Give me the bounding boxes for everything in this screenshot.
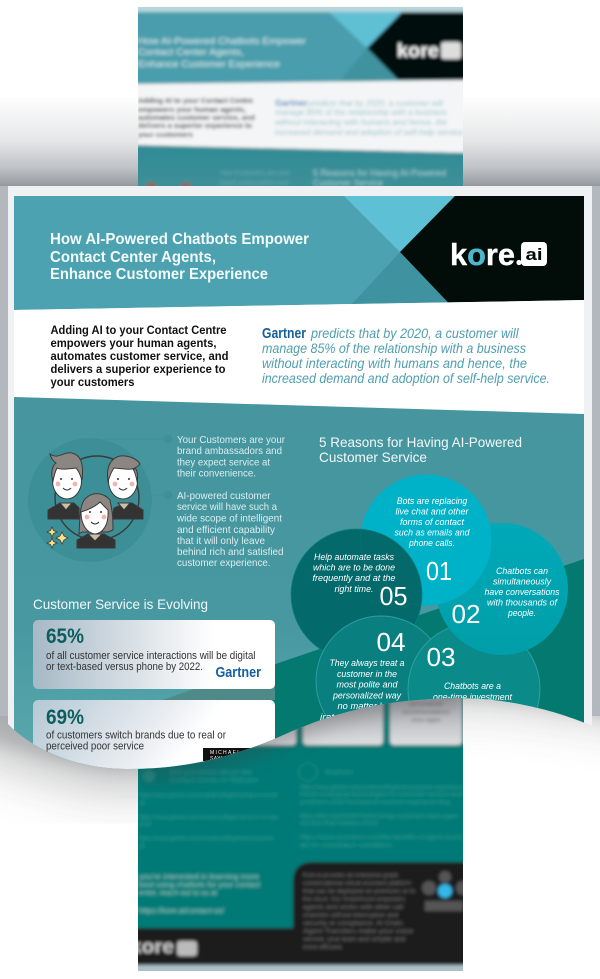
circle 01: 01 xyxy=(426,556,452,586)
Michael Saylor logo: SAYLOR xyxy=(210,756,232,762)
customer text two: that it will only leave xyxy=(177,536,265,547)
back statistics column xyxy=(139,769,279,850)
stat card 69% xyxy=(33,700,275,780)
gap wedge between cards xyxy=(160,660,275,701)
circle 03: 03 xyxy=(426,642,456,672)
teal main section xyxy=(14,397,584,780)
sheet side shadows xyxy=(0,186,600,716)
intro text: your customers xyxy=(50,376,134,389)
kore.ai logo: kore xyxy=(450,237,515,272)
back sources column: trends-emerging-technologies-in-customer-service-and xyxy=(300,791,462,798)
title: How AI-Powered Chatbots Empower xyxy=(50,231,309,248)
customer text two: customer experience. xyxy=(177,558,270,569)
circle 05 text xyxy=(312,552,408,611)
front sheet xyxy=(8,186,592,780)
back sources column: Sources xyxy=(325,769,354,776)
back footer text: the cloud. Our SmartAssist empowers xyxy=(303,896,406,903)
back header: kore xyxy=(397,41,439,62)
back statistics column: Contact Center AI Statistics xyxy=(170,777,259,784)
customer text two: service will have such a xyxy=(177,502,277,513)
circle 04: They always treat a xyxy=(330,658,404,669)
back call to action xyxy=(139,874,260,915)
back page base xyxy=(138,698,463,931)
back header: Enhance Customer Experience xyxy=(138,59,280,70)
Gartner logo: Gartner xyxy=(216,665,261,681)
back footer xyxy=(130,862,470,965)
back intro band: without interacting with humans and hence, the xyxy=(275,118,448,127)
Michael Saylor logo: MICHAEL xyxy=(210,750,240,756)
dark triangle xyxy=(352,252,448,304)
Gartner prediction xyxy=(262,325,550,386)
back stat cards: recommendations xyxy=(402,710,450,716)
back statistics column: 2019 xyxy=(139,821,151,828)
kore.ai logo: ai xyxy=(526,245,542,264)
intro text: automates customer service, and xyxy=(50,350,228,363)
customer text two: AI-powered customer xyxy=(177,491,271,502)
back statistics column: https://www.gartner.com/smarterwithgartner/ai-in-cx-now xyxy=(139,814,278,821)
customer text one: brand ambassadors and xyxy=(177,446,282,457)
blurred back page xyxy=(130,0,470,979)
back sources column: https://hbr.org/2018/07/what-brings-customers-back-again xyxy=(300,813,458,820)
back footer text xyxy=(303,872,415,951)
circle 04 xyxy=(316,616,446,746)
back statistics column: 19 xyxy=(139,800,145,807)
back footer logo: kore xyxy=(130,937,174,958)
bullet dots xyxy=(164,437,172,494)
circle 03: one-time investment xyxy=(433,692,512,703)
back call to action: https://kore.ai/contact-us/ xyxy=(139,908,224,915)
back sources column: service-that-matters-2019 xyxy=(300,820,378,827)
back footer text: agents and works with other call xyxy=(303,904,404,911)
back stat cards xyxy=(250,698,463,749)
stat card 65% xyxy=(33,620,275,689)
customer text one: Your Customers are your xyxy=(177,435,286,446)
back teal section: 5 Reasons for Having AI-Powered xyxy=(313,168,446,178)
back footer text: channels without interruption and xyxy=(303,912,398,919)
sheet drop shadow xyxy=(0,698,600,816)
intro white band xyxy=(14,300,584,414)
customer text two: behind rich and satisfied xyxy=(177,547,284,558)
back sources column: predictions-2020-and-beyond-customer-experience-blog xyxy=(300,799,450,806)
back statistics column: https://www.gartner.com/smarterwithgartner/top-cx-trends xyxy=(139,792,279,799)
circle 05 text: frequently and at the xyxy=(312,573,396,584)
back footer logo xyxy=(130,937,197,958)
circle 01: phone calls. xyxy=(408,538,455,549)
back intro band: Gartner xyxy=(275,98,308,108)
circle 01 xyxy=(360,474,492,606)
circle 03 xyxy=(408,623,540,755)
customer text two: wide scope of intelligent xyxy=(176,514,282,524)
circle 04: most polite and xyxy=(336,680,398,690)
back call to action: bout using chatbots for your contact xyxy=(139,882,260,889)
back teal section: Customer Service xyxy=(313,178,383,188)
back footer text: that can be deployed on-premises or in xyxy=(303,888,415,895)
circle 02: people. xyxy=(507,608,536,619)
back page top edge xyxy=(138,7,463,16)
back intro band: Adding AI to your Contact Centre xyxy=(138,96,253,105)
back teal section: Your Customers are your xyxy=(220,170,291,177)
circle 05 text: which are to be done xyxy=(313,562,395,574)
back statistics column: Did you know about the xyxy=(170,769,252,776)
circle 05 overlap xyxy=(291,529,422,660)
intro text: delivers a superior experience to xyxy=(50,363,226,376)
back header xyxy=(130,12,470,84)
title: Enhance Customer Experience xyxy=(50,266,268,283)
back call to action: enter, reach out to us at xyxy=(139,890,217,897)
title xyxy=(50,231,309,283)
faces xyxy=(56,478,134,524)
circle 01: forms of contact xyxy=(400,517,464,528)
back bottom edge xyxy=(138,962,463,971)
circle 04: irate the customer is. xyxy=(320,712,414,723)
back footer text: service, your team and simpler and xyxy=(303,936,405,943)
header band xyxy=(14,196,584,310)
back sources column: https://www.accenture.com/the-benefits-of-agent-assist xyxy=(300,834,462,841)
light triangle xyxy=(344,196,455,252)
back footer text: conversational virtual assistant platform xyxy=(303,880,411,887)
sheet border xyxy=(8,186,592,776)
back teal section xyxy=(138,146,463,186)
customer text two xyxy=(176,491,284,569)
customer text one xyxy=(177,435,286,480)
Gartner prediction: predicts that by 2020, a customer will xyxy=(310,326,519,341)
title: Contact Center Agents, xyxy=(50,249,216,266)
back teal section: brand ambassadors and xyxy=(220,180,288,187)
back people icon xyxy=(422,871,470,911)
circle 03: Chatbots are a xyxy=(444,681,501,692)
heading: customer service is evolving: Customer Service is Evolving xyxy=(33,596,208,612)
back intro band: automates customer service, and xyxy=(138,113,255,122)
customer text one: their convenience. xyxy=(177,468,256,480)
circle 02: have conversations xyxy=(484,587,560,598)
man right xyxy=(108,456,143,519)
circle 04: no matter how xyxy=(338,701,398,712)
stat card 65%: or text-based versus phone by 2022. xyxy=(46,661,203,673)
black logo panel xyxy=(400,196,584,302)
circle 04: 04 xyxy=(376,627,406,657)
circle 04: customer in the xyxy=(337,669,397,680)
Gartner prediction: manage 85% of the relationship with a business xyxy=(262,341,526,356)
back stat cards: once again xyxy=(411,718,441,724)
back footer text: Agent Transfers make your voice xyxy=(303,928,413,935)
back intro band: empowers your human agents, xyxy=(138,105,246,114)
heading: 5 reasons: 5 Reasons for Having AI-Powered xyxy=(319,434,522,450)
people icon xyxy=(28,438,168,562)
back statistics column: https://www.gartner.com/smarterwithgartner/customer xyxy=(139,835,275,842)
stat card 69%: of customers switch brands due to real or xyxy=(46,730,226,742)
back call to action: you're interested in learning more xyxy=(139,874,259,881)
customer text two: and efficient capability xyxy=(177,525,276,536)
Michael Saylor logo xyxy=(203,748,253,762)
customer text one: they expect service at xyxy=(177,458,270,468)
back intro band: increased demand and adoption of self-help service. xyxy=(275,128,465,137)
intro text xyxy=(50,324,228,389)
Gartner prediction: without interacting with humans and hence, the xyxy=(262,356,527,371)
circle 05 text: Help automate tasks xyxy=(314,552,394,563)
circle 02 xyxy=(436,523,568,655)
kore.ai logo xyxy=(452,242,547,266)
back intro band: predicts that by 2020, a customer will xyxy=(307,99,443,108)
circle 05 base xyxy=(291,529,422,660)
back sources column xyxy=(299,763,462,849)
back footer text: Kore.ai provides an enterprise-grade xyxy=(303,872,398,879)
back header: Contact Center Agents, xyxy=(138,47,244,58)
shadow above sheet xyxy=(0,95,600,186)
back intro band: your customers xyxy=(138,130,193,139)
back footer text: security or compliance. AI Chats xyxy=(303,920,404,927)
back statistics column: 20 xyxy=(139,843,145,850)
circle 02: simultaneously xyxy=(493,576,552,588)
stat card 69%: 69% xyxy=(46,706,84,729)
back intro band: delivers a superior experience to xyxy=(138,121,252,130)
stat card 69%: perceived poor service xyxy=(46,740,144,752)
heading: 5 reasons: Customer Service xyxy=(319,449,427,465)
back sources column: https://www.gartner.com/smarterwithgartner/customer-experience xyxy=(300,784,462,791)
woman xyxy=(77,494,115,548)
circle 02: 02 xyxy=(452,599,480,629)
stat card 65%: 65% xyxy=(46,625,84,648)
Gartner prediction: increased demand and adoption of self-help service. xyxy=(262,371,550,386)
stat card 65%: of all customer service interactions will be digital xyxy=(46,650,256,662)
back stat cards: personalised xyxy=(409,702,443,708)
back sources column: ai-in-contact-centers xyxy=(300,842,393,849)
circle 01: such as emails and xyxy=(394,528,470,538)
circle 01: live chat and other xyxy=(396,506,469,518)
back header: How AI-Powered Chatbots Empower xyxy=(138,36,306,47)
sparkle stars xyxy=(47,527,68,548)
Gartner prediction: Gartner xyxy=(262,325,306,342)
back intro band xyxy=(130,80,470,153)
circle 02: Chatbots can xyxy=(496,566,548,577)
intro text: Adding AI to your Contact Centre xyxy=(50,324,227,337)
circle 01: Bots are replacing xyxy=(397,496,468,507)
back intro band: manage 85% of the relationship with a business xyxy=(275,108,447,117)
circle 05 text: 05 xyxy=(380,581,408,611)
back footer text: more efficient. xyxy=(303,944,343,951)
shadow cast on back page xyxy=(138,698,463,783)
circle 02: with thousands of xyxy=(487,598,558,608)
dark teal wedge xyxy=(14,559,584,780)
heading: 5 reasons xyxy=(319,434,522,465)
man left xyxy=(48,453,83,519)
intro text: empowers your human agents, xyxy=(50,337,216,350)
circle 05 text: right time. xyxy=(334,584,374,595)
circle 04: personalized way xyxy=(332,690,402,702)
